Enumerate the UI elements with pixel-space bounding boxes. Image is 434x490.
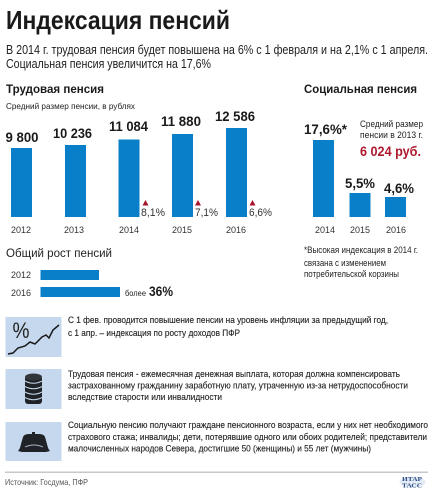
bar chart: labour pension: 2013 bbox=[64, 225, 84, 235]
icon: coin stack bbox=[6, 369, 62, 409]
bar chart: social pension: 2014 bbox=[315, 225, 335, 235]
bar chart: social pension: 2015 bbox=[350, 225, 370, 235]
bar chart: labour pension: 2015 bbox=[172, 225, 192, 235]
callout: average social pension: пенсии в 2013 г. bbox=[360, 130, 423, 140]
horizontal bars: более bbox=[125, 288, 146, 298]
intro text bbox=[6, 43, 428, 71]
callout: average social pension: 6 024 руб. bbox=[360, 144, 421, 159]
bar chart: labour pension: 7,1% bbox=[195, 207, 218, 219]
bar chart: labour pension: 10 236 bbox=[53, 125, 92, 141]
intro text: Социальная пенсия увеличится на 17,6% bbox=[6, 57, 211, 71]
panel: overall growth bbox=[6, 246, 173, 299]
bar chart: labour pension: 2014 bbox=[119, 225, 139, 235]
text: labour pension definition bbox=[68, 369, 408, 402]
heading: labour pension: Трудовая пенсия bbox=[6, 82, 104, 96]
text: indexation dates bbox=[68, 315, 388, 338]
bar chart: labour pension: 8,1% bbox=[141, 207, 165, 219]
bar chart: labour pension: 11 084 bbox=[109, 118, 148, 134]
bar chart: social pension: 5,5% bbox=[345, 175, 376, 191]
icon: percent growth: % bbox=[12, 318, 30, 343]
horizontal bars bbox=[11, 270, 173, 299]
logo: ITAR-TASS bbox=[400, 476, 426, 490]
chart subtitle: Средний размер пенсии, в рублях bbox=[6, 101, 136, 111]
text: labour pension definition: вследствие старости или инвалидности bbox=[68, 392, 222, 402]
text: labour pension definition: застрахованному гражданину заработную плату, утраченную из-за нетрудоспособности bbox=[68, 380, 408, 390]
heading: social pension: Социальная пенсия bbox=[304, 82, 417, 96]
footnote bbox=[304, 245, 418, 279]
title: Индексация пенсий bbox=[6, 5, 230, 35]
footnote: связана с изменением bbox=[304, 258, 386, 268]
horizontal bars: 2012 bbox=[11, 270, 31, 280]
heading: overall growth: Общий рост пенсий bbox=[6, 246, 112, 260]
text: labour pension definition: Трудовая пенсия - ежемесячная денежная выплата, которая должна компенсировать bbox=[68, 369, 400, 379]
bar chart: labour pension: 11 880 bbox=[161, 113, 201, 129]
horizontal bars: 36% bbox=[149, 284, 173, 299]
bar chart: labour pension: 6,6% bbox=[249, 207, 272, 219]
logo: ITAR-TASS: ТАСС bbox=[402, 482, 422, 490]
icon: purse bbox=[6, 422, 62, 461]
callout: average social pension bbox=[360, 119, 423, 159]
icon: percent growth bbox=[6, 317, 62, 357]
callout: average social pension: Средний размер bbox=[360, 119, 423, 129]
bar chart: labour pension: 2012 bbox=[11, 225, 31, 235]
panel: labour pension chart bbox=[6, 82, 272, 235]
bar chart: social pension bbox=[304, 121, 415, 235]
source: Источник: Госдума, ПФР bbox=[5, 477, 88, 487]
footnote: потребительской корзины bbox=[304, 269, 399, 279]
bar chart: labour pension: 12 586 bbox=[215, 108, 255, 124]
text: social pension definition bbox=[68, 420, 428, 454]
bar chart: labour pension: 2016 bbox=[226, 225, 246, 235]
bar chart: social pension: 2016 bbox=[386, 225, 406, 235]
bar chart: social pension: 17,6%* bbox=[304, 121, 348, 137]
bar chart: social pension: 4,6% bbox=[384, 180, 415, 196]
horizontal bars: 2016 bbox=[11, 288, 31, 298]
bar chart: labour pension bbox=[6, 108, 272, 235]
logo: ITAR-TASS: ИТАР bbox=[402, 476, 422, 483]
text: indexation dates: С 1 фев. проводится повышение пенсии на уровень инфляции за предыдущий год, bbox=[68, 315, 388, 325]
text: social pension definition: малочисленных народов Севера, достигшие 50 (женщины) и 55 лет (мужчины) bbox=[68, 444, 371, 454]
text: indexation dates: с 1 апр. – индексация по росту доходов ПФР bbox=[68, 328, 240, 338]
panel: social pension chart bbox=[304, 82, 423, 279]
bar chart: labour pension: 9 800 bbox=[6, 129, 39, 145]
footnote: *Высокая индексация в 2014 г. bbox=[304, 245, 418, 255]
